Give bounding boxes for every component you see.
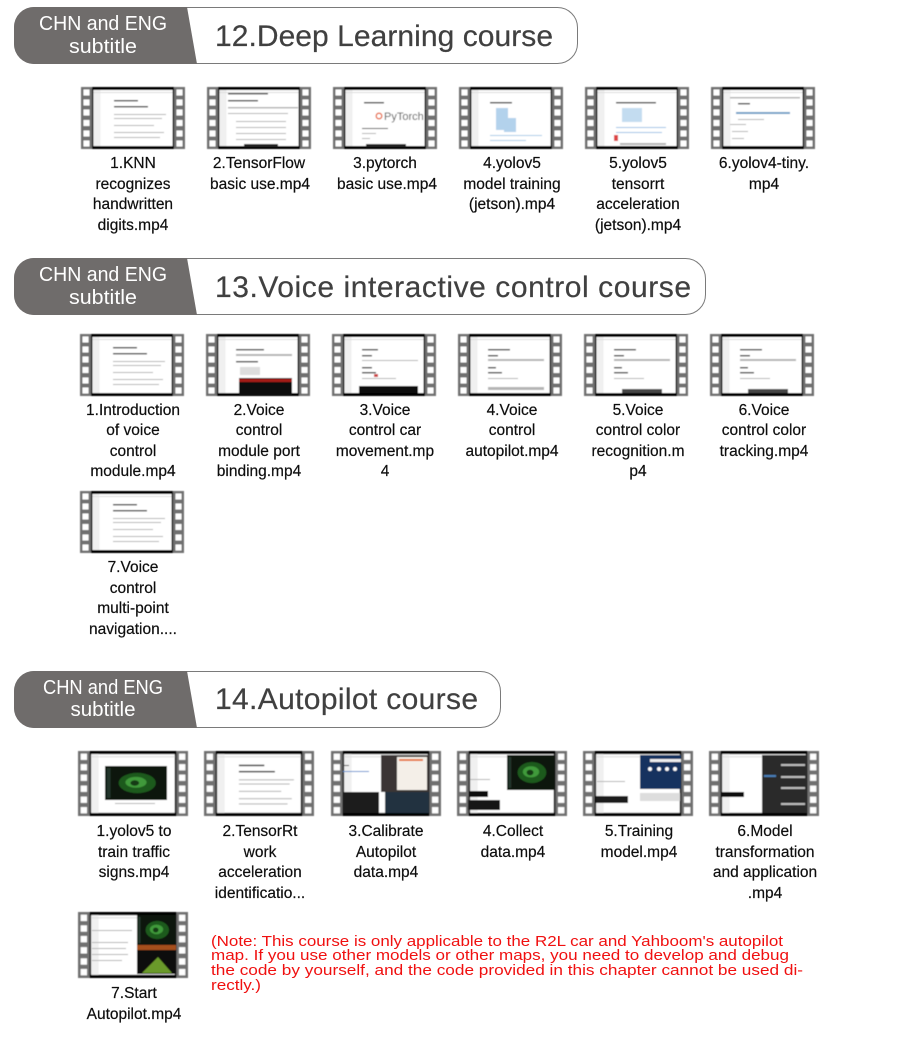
labels: section 14: data.mp4 — [481, 844, 546, 861]
subtitle badge: CHN and ENG — [39, 13, 167, 35]
subtitle badge: subtitle — [70, 699, 136, 721]
labels: section 13: 2.Voice — [234, 402, 284, 419]
labels: section 14: 4.Collect — [483, 823, 544, 840]
labels: section 13: control — [110, 443, 156, 460]
thumbnail 7 — [80, 491, 184, 553]
labels: section 12: basic use.mp4 — [210, 176, 310, 193]
thumbnail 4 — [458, 334, 562, 396]
labels: section 14: Autopilot.mp4 — [87, 1006, 182, 1023]
labels: section 13: control color — [722, 422, 806, 439]
labels: section 14: model.mp4 — [601, 844, 678, 861]
labels: section 13: tracking.mp4 — [720, 443, 809, 460]
labels: section 14: 3.Calibrate — [349, 823, 423, 840]
subtitle badge: subtitle — [69, 36, 137, 58]
thumbnail 7 — [78, 912, 188, 978]
labels: section 13: control car — [349, 422, 421, 439]
subtitle badge — [14, 258, 197, 315]
labels: section 14 — [87, 823, 817, 1023]
subtitle badge: subtitle — [69, 287, 137, 309]
labels: section 13: p4 — [629, 463, 647, 480]
note: autopilot applicability: the code by yourself, and the code provided in this chapter cannot be used di- — [211, 962, 803, 979]
labels: section 14: and application — [713, 864, 817, 881]
labels: section 13: 6.Voice — [739, 402, 789, 419]
labels: section 13: module.mp4 — [90, 463, 176, 480]
subtitle badge — [14, 671, 197, 728]
labels: section 12: 5.yolov5 — [609, 155, 667, 172]
labels: section 14: 1.yolov5 to — [97, 823, 171, 840]
subtitle badge: CHN and ENG — [39, 264, 167, 286]
note: autopilot applicability: rectly.) — [211, 977, 261, 994]
thumbnail 6 — [711, 87, 815, 149]
header: section 13 — [14, 258, 706, 315]
subtitle badge: CHN and ENG — [43, 677, 163, 699]
labels: section 13: control — [110, 580, 156, 597]
header: section 12 — [14, 7, 578, 64]
thumbnails: section 14 — [78, 751, 819, 978]
labels: section 14: identificatio... — [215, 885, 305, 902]
thumbnail 1 — [78, 751, 188, 816]
labels: section 13: movement.mp — [336, 443, 434, 460]
labels: section 12: model training — [463, 176, 561, 193]
labels: section 12: recognizes — [96, 176, 171, 193]
labels: section 12: acceleration — [596, 196, 680, 213]
thumbnails: section 13 — [80, 334, 814, 553]
labels: section 14: data.mp4 — [354, 864, 419, 881]
labels: section 13: 7.Voice — [108, 559, 158, 576]
labels: section 13: autopilot.mp4 — [465, 443, 559, 460]
labels: section 14: Autopilot — [356, 844, 417, 861]
header: section 14 — [14, 671, 500, 728]
note: autopilot applicability: map. If you use other models or other maps, you need to develop and debug — [211, 947, 789, 964]
labels: section 13: 5.Voice — [613, 402, 663, 419]
section 14 title: 14.Autopilot course — [215, 683, 478, 716]
thumbnail 6 — [710, 334, 814, 396]
subtitle badge — [14, 7, 197, 64]
labels: section 13: control — [236, 422, 282, 439]
labels: section 12: (jetson).mp4 — [469, 196, 555, 213]
labels: section 14: work — [243, 844, 277, 861]
labels: section 13: recognition.m — [591, 443, 685, 460]
labels: section 12: mp4 — [749, 176, 779, 193]
thumbnail 1 — [80, 334, 184, 396]
labels: section 12: 6.yolov4-tiny. — [719, 155, 809, 172]
thumbnail 3: PyTorch — [333, 87, 437, 149]
thumbnail 4 — [457, 751, 567, 816]
thumbnail 3 — [331, 751, 441, 816]
labels: section 13: multi-point — [97, 600, 169, 617]
note: autopilot applicability: (Note: This course is only applicable to the R2L car and Yahboom's autopilot — [211, 933, 784, 950]
labels: section 13 — [86, 402, 809, 638]
labels: section 13: module port — [218, 443, 301, 460]
section 13 title: 13.Voice interactive control course — [215, 271, 691, 304]
thumbnail 2 — [204, 751, 314, 816]
thumbnail 5 — [583, 751, 693, 816]
note: autopilot applicability — [211, 933, 803, 994]
section 12 title: 12.Deep Learning course — [215, 20, 553, 53]
thumbnail 2 — [206, 334, 310, 396]
labels: section 14: transformation — [715, 844, 815, 861]
labels: section 13: binding.mp4 — [217, 463, 302, 480]
labels: section 12: 4.yolov5 — [483, 155, 541, 172]
labels: section 13: 4.Voice — [487, 402, 537, 419]
labels: section 13: control — [489, 422, 535, 439]
thumbnail 5 — [585, 87, 689, 149]
thumbnail 1 — [81, 87, 185, 149]
labels: section 12: (jetson).mp4 — [595, 217, 681, 234]
labels: section 13: 1.Introduction — [86, 402, 180, 419]
labels: section 12: 2.TensorFlow — [213, 155, 306, 172]
thumbnail 6 — [709, 751, 819, 816]
labels: section 13: navigation.... — [89, 621, 177, 638]
labels: section 12: 3.pytorch — [353, 155, 417, 172]
labels: section 14: .mp4 — [748, 885, 783, 902]
labels: section 13: of voice — [106, 422, 160, 439]
labels: section 14: train traffic — [98, 844, 170, 861]
labels: section 14: 7.Start — [111, 985, 158, 1002]
thumbnail 3: PyTorch: PyTorch — [384, 111, 424, 123]
thumbnails: section 12 — [81, 87, 815, 149]
labels: section 13: 3.Voice — [360, 402, 410, 419]
thumbnail 2 — [207, 87, 311, 149]
labels: section 14: signs.mp4 — [99, 864, 170, 881]
labels: section 13: control color — [596, 422, 680, 439]
labels: section 12: handwritten — [93, 196, 173, 213]
thumbnail 5 — [584, 334, 688, 396]
labels: section 14: 2.TensorRt — [223, 823, 298, 840]
labels: section 14: 5.Training — [605, 823, 673, 840]
labels: section 14: 6.Model — [737, 823, 793, 840]
labels: section 12: 1.KNN — [110, 155, 156, 172]
labels: section 12: tensorrt — [612, 176, 665, 193]
thumbnail 3 — [332, 334, 436, 396]
labels: section 14: acceleration — [218, 864, 302, 881]
thumbnail 4 — [459, 87, 563, 149]
labels: section 12 — [93, 155, 809, 234]
labels: section 13: 4 — [381, 463, 390, 480]
labels: section 12: digits.mp4 — [98, 217, 169, 234]
labels: section 12: basic use.mp4 — [337, 176, 437, 193]
